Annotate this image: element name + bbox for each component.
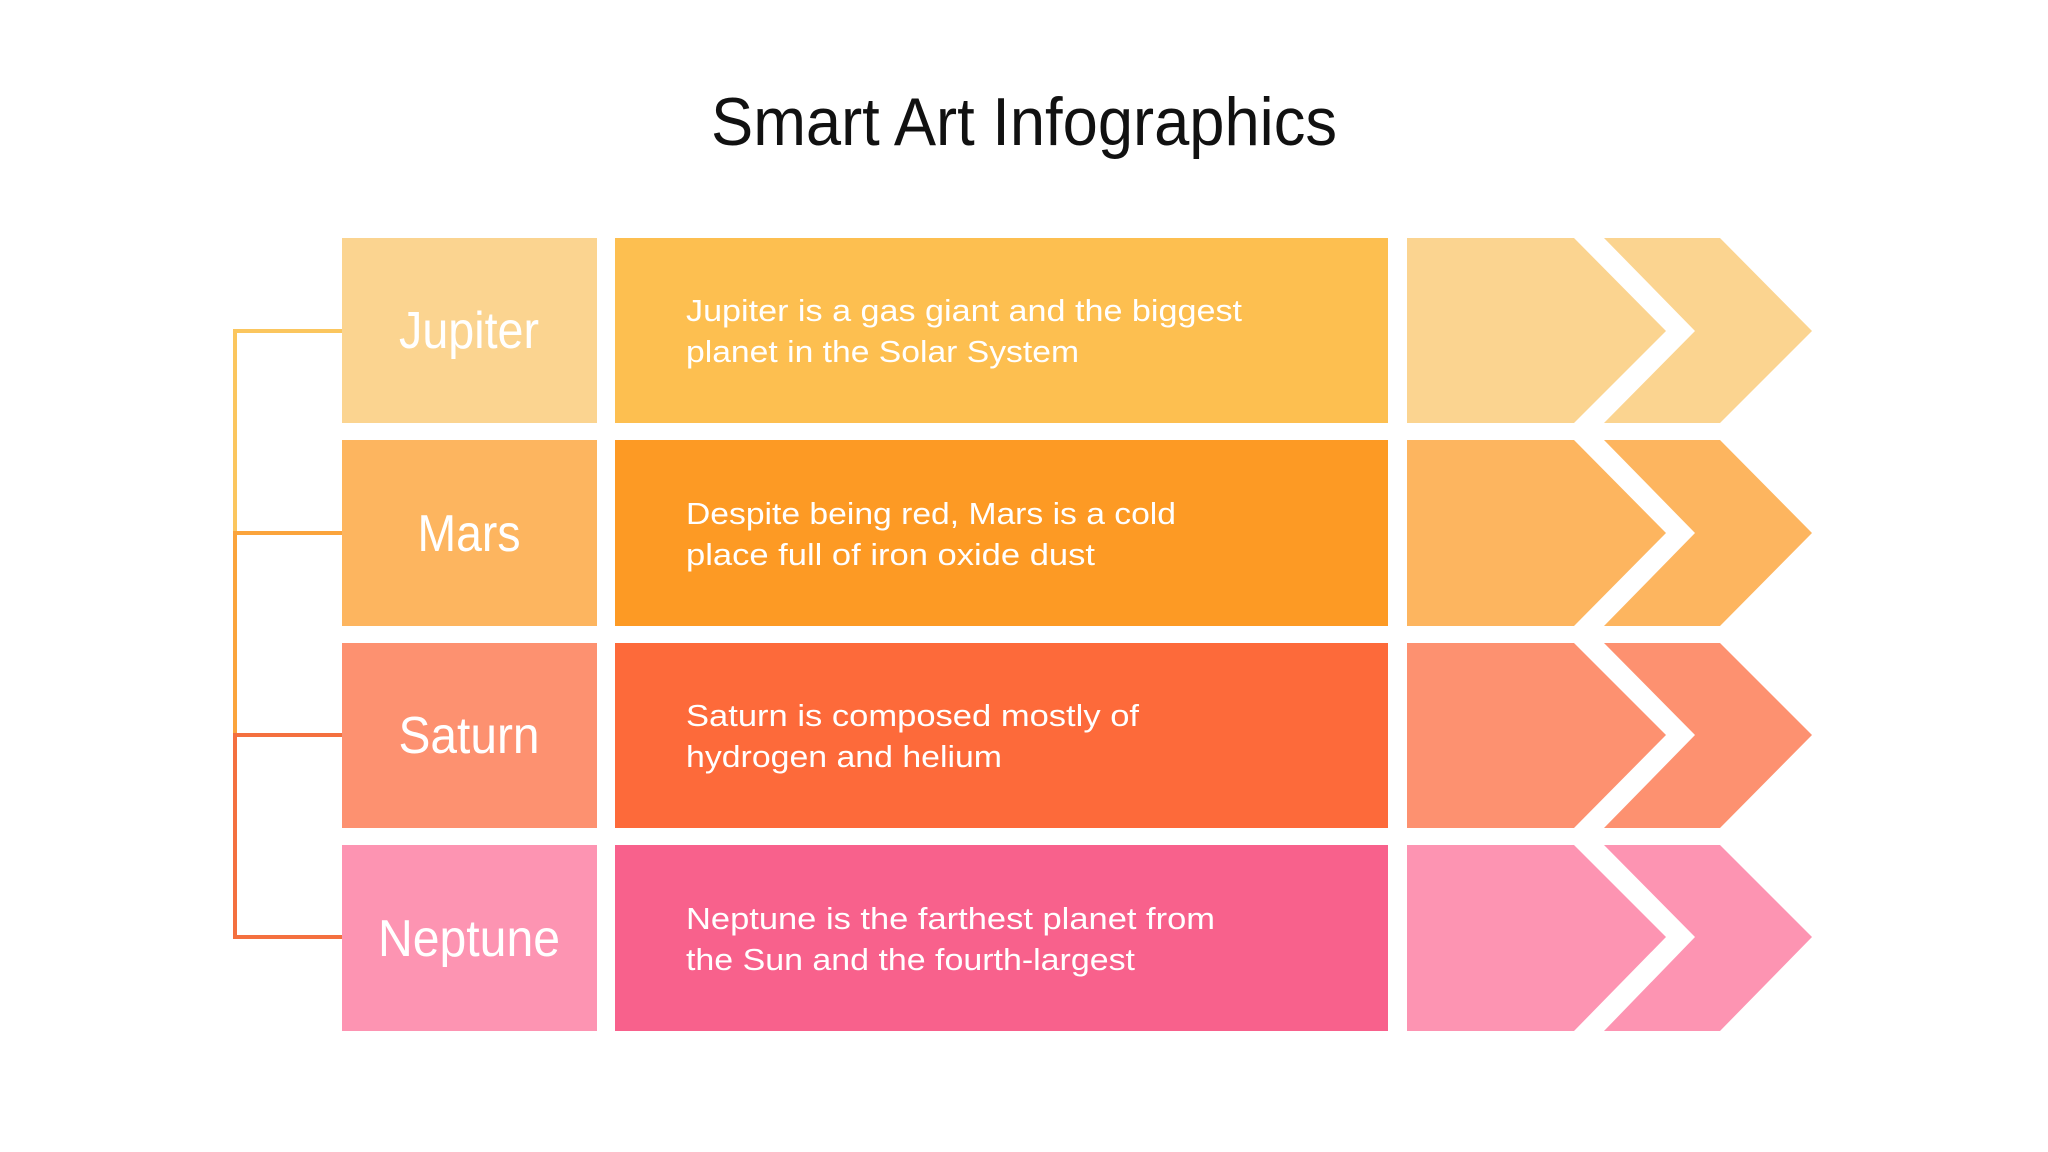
title: Smart Art Infographics	[711, 84, 1337, 160]
row: Neptune	[342, 845, 1812, 1031]
row: Jupiter: planet in the Solar System	[686, 334, 1079, 369]
row: Saturn: Saturn is composed mostly of	[686, 698, 1139, 733]
row: Mars: Despite being red, Mars is a cold	[686, 496, 1176, 531]
row: Neptune: the Sun and the fourth-largest	[686, 942, 1135, 977]
row: Saturn: hydrogen and helium	[686, 739, 1002, 774]
row: Jupiter: Jupiter is a gas giant and the biggest	[686, 293, 1242, 328]
row: Jupiter	[342, 238, 1812, 423]
bracket connector	[235, 331, 342, 937]
row: Mars: place full of iron oxide dust	[686, 537, 1095, 572]
row: Saturn: Saturn	[398, 707, 540, 765]
row: Jupiter: Jupiter	[399, 302, 539, 360]
row: Saturn	[342, 643, 1812, 828]
row: Mars: Mars	[418, 505, 520, 563]
row: Neptune: Neptune	[378, 910, 560, 968]
row: Mars	[342, 440, 1812, 626]
row: Neptune: Neptune is the farthest planet from	[686, 901, 1215, 936]
